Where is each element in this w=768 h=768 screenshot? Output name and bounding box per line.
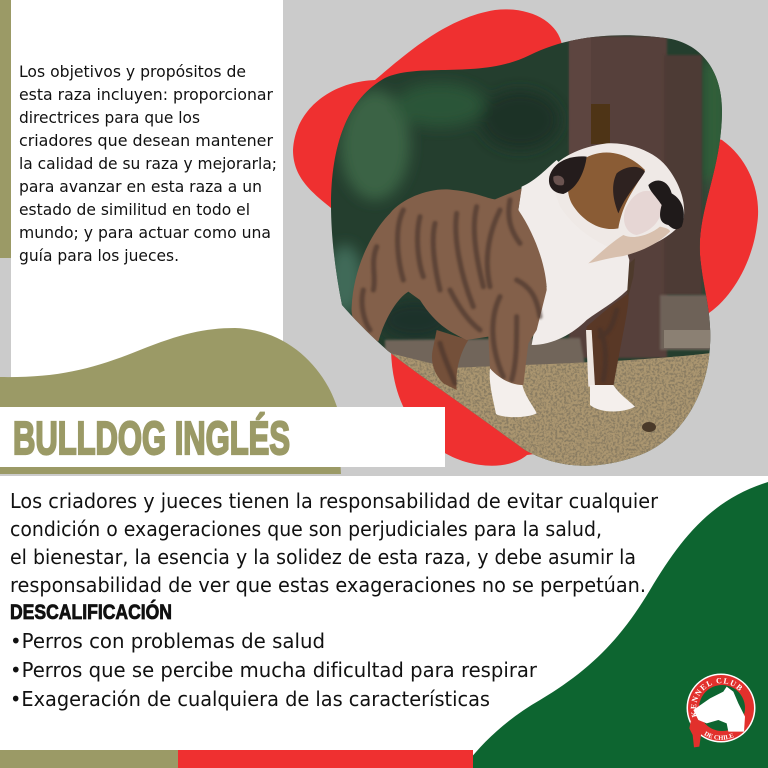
photo: bulldog: [325, 30, 727, 475]
ear: [549, 156, 587, 194]
nose and lip: [648, 180, 684, 229]
brindle body: [352, 188, 547, 385]
title: BULLDOG INGLÉS: [13, 412, 290, 464]
intro text block: mundo; y para actuar como una: [19, 223, 271, 242]
intro text block: la calidad de su raza y mejorarla;: [19, 154, 277, 173]
main paragraph: condición o exageraciones que son perjudiciales para la salud,: [10, 517, 602, 541]
lower lip: [588, 227, 670, 263]
title banner: [0, 407, 445, 467]
bottom olive bar: [0, 750, 178, 768]
logo: Kennel Club de Chile: KENNEL CLUB: [690, 678, 742, 718]
photo background: [325, 30, 727, 475]
brindle stripes: [362, 200, 617, 383]
panel: upper white column: [11, 0, 283, 385]
green corner shape: [463, 482, 768, 768]
olive wave shape: [0, 328, 341, 474]
head white: [548, 143, 684, 255]
intro text block: estado de similitud en todo el: [19, 200, 250, 219]
far front leg: [586, 293, 629, 387]
intro text block: criadores que desean mantener: [19, 131, 273, 150]
intro text block: [19, 62, 277, 265]
disqualification list: •Perros que se percibe mucha dificultad para respirar: [10, 658, 538, 682]
eye patch: [613, 167, 645, 213]
olive side stripe: [0, 0, 11, 258]
muzzle: [624, 191, 662, 235]
main paragraph: el bienestar, la esencia y la solidez de esta raza, y debe asumir la: [10, 545, 636, 569]
ground: [392, 353, 710, 466]
intro text block: Los objetivos y propósitos de: [19, 62, 246, 81]
disqualification list: •Perros con problemas de salud: [10, 629, 325, 653]
intro text block: directrices para que los: [19, 108, 200, 127]
red blob behind photo: [293, 9, 758, 466]
heading: descalificación: DESCALIFICACIÓN: [10, 600, 172, 624]
far foot: [590, 385, 635, 411]
neck stripe: [627, 258, 635, 297]
far hind leg: [432, 330, 468, 390]
intro text block: guía para los jueces.: [19, 246, 179, 265]
bulldog figure: [352, 143, 684, 417]
intro text block: esta raza incluyen: proporcionar: [19, 85, 273, 104]
main paragraph: responsabilidad de ver que estas exageraciones no se perpetúan.: [10, 573, 646, 597]
disqualification list: [10, 629, 538, 711]
white chest: [518, 160, 629, 345]
disqualification list: •Exageración de cualquiera de las características: [10, 687, 490, 711]
main paragraph: Los criadores y jueces tienen la responsabilidad de evitar cualquier: [10, 489, 659, 513]
bottom red bar: [178, 750, 473, 768]
panel: lower white section: [0, 476, 768, 768]
head brown patch: [568, 153, 645, 229]
logo: Kennel Club de Chile: [686, 674, 756, 748]
trunks: [569, 36, 667, 358]
main paragraph: [10, 489, 659, 597]
logo: Kennel Club de Chile: DE CHILE: [704, 731, 734, 740]
front foot: [490, 368, 537, 417]
intro text block: para avanzar en esta raza a un: [19, 177, 262, 196]
